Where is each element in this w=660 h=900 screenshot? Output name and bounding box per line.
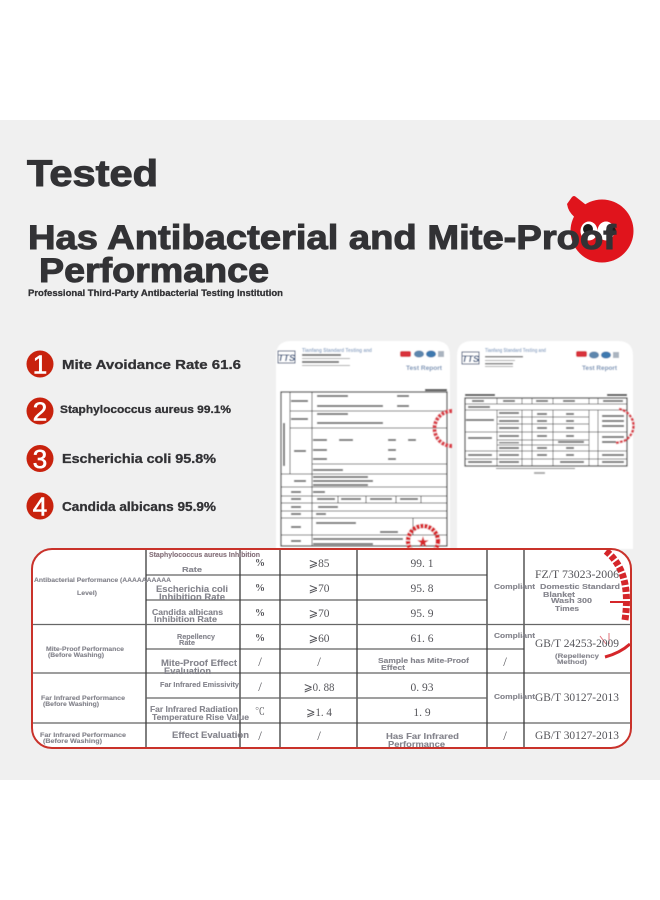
background panel <box>0 120 660 780</box>
column 1 labels: (Before Washing) <box>43 738 102 745</box>
column 7 test methods: Domestic Standard <box>540 582 620 591</box>
heading: performance line 2: Performance <box>39 252 269 290</box>
column 7 test methods: GB/T 30127-2013 <box>535 692 619 704</box>
column 6 conclusions: / <box>503 728 507 743</box>
lab name: Tianfang Standard Testing and <box>485 348 546 354</box>
column 5 results: 61. 6 <box>410 633 434 645</box>
column 2 labels: Inhibition Rate <box>154 615 218 624</box>
label: Test Report: Test Report <box>406 365 443 372</box>
column 2 labels: Evaluation <box>164 666 211 676</box>
result 3: Escherichia coli 95.8% <box>62 452 216 466</box>
column 4 standards <box>304 556 334 743</box>
column 2 labels: Far Infrared Emissivity <box>160 682 239 689</box>
column 2 labels: Staphylococcus aureus Inhibition <box>149 552 260 559</box>
icon: red mascot logo <box>567 196 634 262</box>
panel: results table <box>32 549 631 749</box>
report form <box>281 392 447 546</box>
column 1 labels: (Before Washing) <box>48 652 104 659</box>
column 4 standards: ⩾0. 88 <box>304 680 334 694</box>
column 3 units: % <box>255 633 265 644</box>
column 2 labels: Effect Evaluation <box>172 730 249 740</box>
result 1: 1 <box>33 350 47 380</box>
stamp: right edge <box>616 409 633 443</box>
column 2 labels: Temperature Rise Value <box>152 713 250 722</box>
column 3 units: % <box>255 558 265 569</box>
subtitle: Professional Third-Party Antibacterial Testing Institution <box>28 288 283 299</box>
column 2 labels: Mite-Proof Effect <box>161 658 237 668</box>
column 1 labels <box>34 577 171 745</box>
column 2 labels: Rate <box>182 565 202 574</box>
column 2 labels: Inhibition Rate <box>159 592 225 602</box>
end line <box>496 468 575 474</box>
logo: TTS: TTS <box>462 354 479 364</box>
stamp: table overlay <box>600 551 630 657</box>
result 4: 4 <box>33 492 47 522</box>
stamp: right edge <box>434 411 452 446</box>
panel: test report page 2 <box>457 341 633 549</box>
column 1 labels: Far Infrared Performance <box>41 695 125 702</box>
table grid <box>32 549 631 748</box>
column 2 labels: Repellency <box>177 634 215 641</box>
column 4 standards: / <box>317 728 321 743</box>
column 7 test methods: FZ/T 73023-2006 <box>535 569 619 581</box>
result 2: Staphylococcus aureus 99.1% <box>60 404 231 416</box>
column 6 conclusions: Compliant <box>494 584 536 591</box>
column 6 conclusions <box>494 584 536 743</box>
column 5 results: 0. 93 <box>410 682 434 694</box>
column 5 results: 95. 8 <box>410 583 434 595</box>
report number <box>465 394 495 396</box>
column 3 units: / <box>258 679 262 694</box>
column 5 results <box>378 558 470 749</box>
column 1 labels: (Before Washing) <box>43 701 99 708</box>
column 3 units: / <box>258 654 262 669</box>
column 7 test methods <box>535 569 620 742</box>
column 4 standards: ⩾1. 4 <box>306 705 332 719</box>
column 5 results: Effect <box>381 663 406 672</box>
column 2 labels: Candida albicans <box>152 608 224 617</box>
column 7 test methods: GB/T 30127-2013 <box>535 730 619 742</box>
lab name: Tianfang Standard Testing and <box>302 348 372 354</box>
column 6 conclusions: Compliant <box>494 633 536 640</box>
heading: performance line 1: Has Antibacterial and Mite-Proof <box>28 219 617 257</box>
column 4 standards: ⩾60 <box>308 631 330 645</box>
column 6 conclusions: / <box>503 654 507 669</box>
column 7 test methods: GB/T 24253-2009 <box>535 638 619 650</box>
column 5 results: Has Far Infrared <box>386 731 459 741</box>
column 4 standards: / <box>317 654 321 669</box>
column 5 results: 99. 1 <box>410 558 434 570</box>
column 7 test methods: Blanket <box>543 590 576 599</box>
result 1 <box>26 350 241 380</box>
heading: Tested: Tested <box>27 153 158 194</box>
column 3 units: ℃ <box>255 706 265 718</box>
results list <box>26 350 241 522</box>
column 1 labels: Mite-Proof Performance <box>46 646 124 653</box>
certification marks <box>576 351 619 358</box>
result 4 <box>26 492 216 522</box>
certification marks <box>400 350 444 358</box>
result 3 <box>26 444 216 474</box>
column 2 labels: Rate <box>179 640 195 647</box>
column 5 results: Sample has Mite-Proof <box>378 656 470 665</box>
stamp: bottom: ★ <box>416 534 430 551</box>
column 1 labels: Far Infrared Performance <box>40 732 126 739</box>
title <box>27 153 617 299</box>
result 1: Mite Avoidance Rate 61.6 <box>62 357 241 372</box>
column 1 labels: Antibacterial Performance (AAAAAAAAAA <box>34 577 171 584</box>
column 3 units <box>255 558 265 743</box>
column 1 labels: Level) <box>77 590 97 597</box>
column 3 units: % <box>255 583 265 594</box>
report results table <box>465 398 627 466</box>
column 6 conclusions: Compliant <box>494 694 536 701</box>
column 4 standards: ⩾70 <box>308 581 330 595</box>
column 5 results: Performance <box>388 739 445 749</box>
logo: TTS: TTS <box>278 353 295 363</box>
table red border <box>32 549 631 748</box>
result 4: Candida albicans 95.9% <box>62 500 216 514</box>
column 5 results: 1. 9 <box>413 707 431 719</box>
column 7 test methods: Times <box>555 604 579 613</box>
stamp: bottom <box>408 526 438 556</box>
column 2 labels <box>149 552 260 740</box>
column 5 results: 95. 9 <box>410 608 434 620</box>
page number <box>425 389 447 391</box>
result 3: 3 <box>33 444 47 474</box>
column 7 test methods: (Repellency <box>555 653 599 660</box>
result 2: 2 <box>33 396 47 426</box>
column 4 standards: ⩾70 <box>308 606 330 620</box>
label: Test Report: Test Report <box>582 365 618 372</box>
column 7 test methods: Wash 300 <box>551 596 592 605</box>
result 2 <box>26 396 231 426</box>
column 3 units: / <box>258 728 262 743</box>
column 7 test methods: Method) <box>557 659 587 666</box>
panel: test report page 1 <box>276 341 452 556</box>
column 4 standards: ⩾85 <box>308 556 330 570</box>
column 2 labels: Far Infrared Radiation <box>150 705 238 714</box>
column 2 labels: Escherichia coli <box>156 584 228 594</box>
column 3 units: % <box>255 608 265 619</box>
